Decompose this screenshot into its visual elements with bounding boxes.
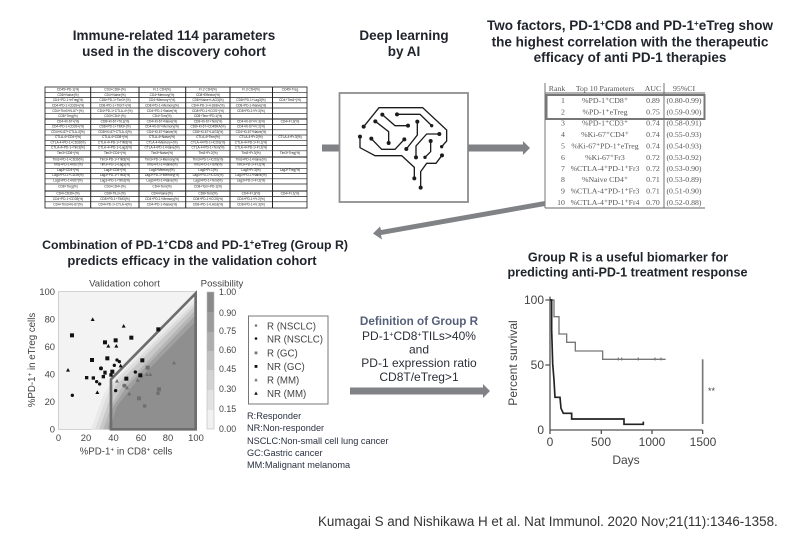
table: 114 immune parameters: CD3+CD4+(%) <box>104 114 126 118</box>
table: 114 immune parameters: CD4+Memory(%) <box>150 93 174 97</box>
chart title: Validation cohort <box>89 278 160 290</box>
table: 114 immune parameters: CTLA-4+Tem(%) <box>196 135 220 139</box>
table: 114 immune parameters: Fr.2 CD4(%) <box>199 88 217 92</box>
colour scale: possibility: 0.45 <box>219 364 236 374</box>
table: top 10 parameters: %CTLA-4⁺PD-1⁺Fr3 <box>571 186 640 196</box>
table: 114 immune parameters: Lag3+PD-1+Ki67(%) <box>53 178 83 182</box>
table: 114 immune parameters <box>45 87 307 208</box>
survival chart <box>506 293 717 467</box>
table: top 10 parameters: 0.75 <box>646 108 660 116</box>
x axis labels: 20 <box>81 432 91 443</box>
y axis labels <box>39 286 55 434</box>
heading: two factors: CD8 and PD-1 <box>605 18 694 33</box>
table: 114 immune parameters: CD8+TILs+(%) <box>104 192 126 196</box>
table: top 10 parameters: 0.71 <box>646 175 660 184</box>
survival chart: 0 <box>537 423 544 437</box>
table: top 10 parameters: (0.55-0.93) <box>666 130 702 139</box>
table: top 10 parameters: 7 <box>561 164 565 173</box>
survival chart: 0 <box>547 435 554 449</box>
heading: deep learning <box>359 28 449 59</box>
definition of group R: TILs>40% <box>422 329 476 343</box>
table: 114 immune parameters: CD4+PD-1+Fr.2(%) <box>237 197 265 201</box>
definition of group R: PD-1 expression ratio <box>361 356 477 370</box>
table: 114 immune parameters: CD4+CD39+(%) <box>56 192 80 196</box>
table: 114 immune parameters: CD8+PD-1+Naive(%) <box>236 104 266 108</box>
table: 114 immune parameters: Lag3+Fr.1(%) <box>198 168 218 172</box>
heading: deep learning: Deep learning <box>359 28 449 43</box>
heading: combination: Combination of PD-1 <box>42 238 164 252</box>
table: 114 immune parameters: Tim3+PD-1+Naive(%) <box>146 163 178 167</box>
table: 114 immune parameters: Lag3+PD-1+Fr.2(%) <box>237 178 265 182</box>
legend: R (MM) <box>267 376 299 386</box>
table: 114 immune parameters: CD8+Ki-67+LAG3(%) <box>193 130 223 134</box>
table: 114 immune parameters: CTLA-4+PD-1+TIM3(%) <box>98 140 132 144</box>
y axis title: %PD-1 <box>27 377 38 407</box>
table: top 10 parameters: 0.72 <box>646 164 660 173</box>
legend: R (GC) <box>267 348 298 360</box>
definition of group R: PD-1 <box>362 329 389 343</box>
table: 114 immune parameters: CD4+Tim3+(%) <box>279 98 301 102</box>
table: 114 immune parameters: Tim3+PD-1+Lag3(%) <box>100 163 130 167</box>
legend: R (NSCLC) <box>267 322 316 332</box>
table: 114 immune parameters: CD8+PD-1+Memory(%) <box>145 104 179 108</box>
table: 114 immune parameters: CD8+PD-1+ICOS+(%) <box>192 109 224 113</box>
table: 114 immune parameters: CTLA-4+CD8+(%) <box>102 135 128 139</box>
x axis title: + <box>110 446 114 454</box>
y axis labels: 80 <box>45 314 55 324</box>
survival axes <box>545 297 703 434</box>
table: 114 immune parameters: CTLA-4+PD-1+Fr.1(%) <box>235 140 267 144</box>
table: 114 immune parameters: CD8+Tem+PD-1(%) <box>194 114 222 118</box>
abbreviations: NR:Non-responder <box>247 423 324 433</box>
y axis labels: 20 <box>45 396 55 407</box>
y axis labels: 60 <box>45 341 55 352</box>
heading: immune parameters <box>73 28 275 59</box>
definition of group R: and <box>409 342 429 356</box>
table: 114 immune parameters: CD4+Tim3+Ki-67(%) <box>53 202 83 206</box>
table: 114 immune parameters: Tim3+PD-1+Memory(%) <box>145 158 179 162</box>
table: 114 immune parameters: CD4+Fr.3(%) <box>242 192 260 196</box>
table: top 10 parameters: (0.59-0.90) <box>666 108 702 116</box>
heading: two factors <box>487 18 773 65</box>
table: 114 immune parameters: CTLA-4+Fr.3(%) <box>278 135 302 139</box>
table: 114 immune parameters: CD8+Effector(%) <box>196 93 220 97</box>
table: 114 immune parameters: Tim3+PD-1+Tem(%) <box>194 163 222 167</box>
survival chart: 1500 <box>690 435 717 449</box>
table: 114 immune parameters: CD4+PD-1+CD39(%) <box>53 197 83 201</box>
table: top 10 parameters: %Ki-67⁺CD4⁺ <box>581 130 629 139</box>
table: top 10 parameters: 9 <box>561 186 565 196</box>
significance bar <box>700 359 705 424</box>
table: 114 immune parameters: CD4+Naive(%) <box>151 192 173 196</box>
table: 114 immune parameters: CD8+Naive(%) <box>57 93 79 97</box>
table: top 10 parameters: 10 <box>557 198 565 207</box>
table: 114 immune parameters: CD4+PD-1+CTLA-4(%) <box>98 202 132 206</box>
table: 114 immune parameters: CTLA-4+Naive(%) <box>149 135 175 139</box>
y axis title: in eTreg cells <box>27 313 38 373</box>
table: 114 immune parameters: Tim3+Fr.2(%) <box>198 151 218 155</box>
table: 114 immune parameters: Lag3+Treg(%) <box>280 168 300 172</box>
table: 114 immune parameters: CD3+CD4+(%) <box>104 184 126 188</box>
table: top 10 parameters: 8 <box>561 175 565 184</box>
table: 114 immune parameters: Lag3+PD-1+CD39(%) <box>52 173 84 177</box>
survival chart: 50 <box>531 358 544 372</box>
table: top 10 parameters: 0.72 <box>646 153 660 162</box>
definition of group R: CD8T/eTreg>1 <box>379 370 459 384</box>
table: 114 immune parameters: CD4+Tem(%) <box>152 184 172 188</box>
colour scale: possibility: 0.15 <box>219 404 236 414</box>
legend <box>248 316 328 404</box>
table: top 10 parameters: %Ki-67⁺PD-1⁺eTreg <box>571 142 639 150</box>
table: 114 immune parameters: Tim3+PD-1+TIM3(%) <box>100 158 130 162</box>
table: 114 immune parameters: CD8+Ki-67+CTLA-4(%) <box>98 130 132 134</box>
table: 114 immune parameters: CD8+Ki-67+TILs(%) <box>101 119 129 123</box>
panel: brain icon box <box>340 93 468 202</box>
table: top 10 parameters: (0.53-0.92) <box>666 153 702 162</box>
x axis labels: 0 <box>56 432 61 443</box>
table: top 10 parameters: 1 <box>561 96 565 105</box>
table: top 10 parameters: 6 <box>561 153 565 162</box>
heading: two factors: the highest correlation with the therapeutic <box>492 34 769 50</box>
table: top 10 parameters: 0.71 <box>646 186 660 196</box>
table: top 10 parameters: %CTLA-4⁺PD-1⁺Fr3 <box>571 164 640 173</box>
table: top 10 parameters: 3 <box>561 118 565 128</box>
colour scale: possibility: 1.00 <box>219 287 236 297</box>
colour scale: possibility: Possibility <box>201 278 244 290</box>
table: top 10 parameters: (0.58-0.91) <box>666 118 702 128</box>
y axis title: + <box>27 373 34 377</box>
table: top 10 parameters: (0.53-0.89) <box>666 175 702 184</box>
heading: two factors: + <box>600 19 605 28</box>
colour scale: possibility <box>201 278 244 434</box>
table: 114 immune parameters: CD4+PD-1+eTreg(%) <box>53 98 83 102</box>
table: 114 immune parameters: CD8+PD-1+Lag3(%) <box>236 98 266 102</box>
table: 114 immune parameters: CD8+PD-1+Tim3+(%) <box>99 98 131 102</box>
table: 114 immune parameters: Tim3+PD-1+Naive(%) <box>235 158 267 162</box>
table: 114 immune parameters: CTLA-4+PD-1+ICOS(%) <box>191 140 225 144</box>
x axis labels: 60 <box>136 432 146 443</box>
table: 114 immune parameters: Lag3+Memory(%) <box>149 168 175 172</box>
scatter plot: validation cohort <box>27 278 204 458</box>
table: 114 immune parameters: CD45+PD-1(%) <box>57 88 79 92</box>
survival chart: 1000 <box>639 435 666 449</box>
table: 114 immune parameters: CTLA-4+PD-1+Lag3(%) <box>98 146 132 150</box>
colour scale: possibility: 0.60 <box>219 345 236 355</box>
table: 114 immune parameters: Tim3+CD4+(%) <box>104 151 126 155</box>
y axis labels: 40 <box>45 368 55 380</box>
table: 114 immune parameters: Tim3+Treg(%) <box>280 151 300 155</box>
table: 114 immune parameters: CD8+PD-1+Fr.3(%) <box>237 109 265 113</box>
heading: combination: + <box>164 238 169 247</box>
table: top 10 parameters: %PD-1⁺CD3⁺ <box>582 118 628 128</box>
survival chart: ** <box>708 386 716 396</box>
survival chart: Days <box>612 453 640 467</box>
x axis labels: 80 <box>163 432 173 443</box>
table: 114 immune parameters: CD8+Treg(%) <box>58 114 78 118</box>
table: 114 immune parameters: Lag3+CD8+(%) <box>104 168 126 172</box>
table: top 10 parameters: %CTLA-4⁺PD-1⁺Fr4 <box>571 198 640 207</box>
table: top 10 parameters: 4 <box>561 130 565 139</box>
table: 114 immune parameters: Fr.1 CD4(%) <box>153 88 171 92</box>
survival chart: Percent survival <box>506 320 520 406</box>
table: 114 immune parameters: Tim3+PD-1+ICOS(%) <box>193 158 223 162</box>
heading: group R: Group R is a useful biomarker for <box>528 250 728 264</box>
table: 114 immune parameters: Fr.3 CD4(%) <box>242 88 260 92</box>
table: 114 immune parameters: CD4+Ki-67+Naive(%) <box>147 130 177 134</box>
table: 114 immune parameters: CTLA-4+PD-1+Naive(%) <box>144 146 180 150</box>
abbreviations: NSCLC:Non-small cell lung cancer <box>247 436 388 446</box>
heading: two factors: efficacy of anti PD-1 therapies <box>534 50 726 65</box>
table: 114 immune parameters: Lag3+PD-1+Naive(%) <box>235 173 267 177</box>
x axis labels: 100 <box>188 432 204 443</box>
table: 114 immune parameters: Lag3+PD-1+ICOS(%) <box>193 173 223 177</box>
table: top 10 parameters: (0.54-0.93) <box>666 142 702 150</box>
table: 114 immune parameters: CD4+Fr.3(%) <box>281 119 299 123</box>
legend: NR (NSCLC) <box>267 334 323 346</box>
table: 114 immune parameters: CD4+Ki-67+(%) <box>57 119 79 123</box>
table: 114 immune parameters: CD8+PD-1+TIGIT+(%) <box>99 104 131 108</box>
x axis title: in CD8 <box>114 446 146 458</box>
survival chart: 100 <box>524 293 544 307</box>
table: 114 immune parameters: CD8+Ki-67+CD45RA(%) <box>190 125 226 129</box>
heading: two factors: Two factors, PD-1 <box>487 18 600 33</box>
heading: combination: eTreg (Group R) <box>254 238 348 252</box>
survival chart: 500 <box>591 435 611 449</box>
table: 114 immune parameters: CD8+Tem(%) <box>198 192 218 196</box>
table: 114 immune parameters: Tim3+PD-1+CD39(%) <box>52 158 84 162</box>
table: top 10 parameters: 2 <box>561 108 565 116</box>
table: 114 immune parameters: CD4+Ki-67+Fr.2(%) <box>237 125 265 129</box>
responder curve <box>550 300 666 360</box>
definition of group R: Definition of Group R <box>360 315 479 328</box>
table: 114 immune parameters: CD45+Treg <box>282 88 298 92</box>
citation: Kumagai S and Nishikawa H et al. Nat Immunol. 2020 Nov;21(11):1346-1358. <box>318 514 778 529</box>
table: 114 immune parameters: CD4+Tim3+Ki-67+(%) <box>52 109 84 113</box>
arrow: results to validation <box>373 201 545 240</box>
table: top 10 parameters: %Naive CD4⁺ <box>582 175 628 184</box>
heading: group R <box>507 250 748 280</box>
heading: combination: predicts efficacy in the validation cohort <box>67 253 317 268</box>
abbreviations: R:Responder <box>247 411 301 421</box>
table: 114 immune parameters: CTLA-4+PD-1+Tim3(%) <box>51 146 85 150</box>
arrow: AI to results <box>468 141 530 155</box>
table: 114 immune parameters: CD8+PD-1+ICOS(%) <box>193 197 223 201</box>
colour scale: possibility: 0.75 <box>219 326 236 336</box>
icon: circuit brain <box>358 108 447 190</box>
abbreviations <box>247 411 388 470</box>
table: 114 immune parameters: CD4+PD-1+CTLA-4+(%) <box>97 109 133 113</box>
table: 114 immune parameters: CD8+PD-1+LAG3(%) <box>193 202 223 206</box>
arrow: table to AI <box>322 144 339 152</box>
heading: group R: predicting anti-PD-1 treatment response <box>507 266 748 280</box>
definition of group R: + <box>417 332 422 338</box>
table: 114 immune parameters: CD4+Ki-67+Memory(%) <box>145 125 179 129</box>
table: 114 immune parameters: CD8+PD-1+TIM3+(%) <box>99 125 131 129</box>
table: 114 immune parameters: CD4+PD-1+Naive(%) <box>147 109 177 113</box>
table: 114 immune parameters: Tim3+PD-1+Fr.2(%) <box>237 163 265 167</box>
table: 114 immune parameters: Tim3+Naive(%) <box>151 151 173 155</box>
x axis labels: 40 <box>108 432 119 443</box>
table: 114 immune parameters: Lag3+CD4+(%) <box>57 168 79 172</box>
table: top 10 parameters: %PD-1⁺CD8⁺ <box>582 96 628 105</box>
table: 114 immune parameters: CD4+PD-1+Memory(%) <box>145 197 179 201</box>
definition of group R <box>360 315 479 384</box>
table: 114 immune parameters: CTLA-4+Fr.2(%) <box>239 135 263 139</box>
table: 114 immune parameters: Tim3+Fr.3(%) <box>241 151 261 155</box>
table: 114 immune parameters: CD8+Treg(%) <box>58 184 78 188</box>
table: 114 immune parameters: CD4+Ki-67+CTLA-4(%) <box>51 130 85 134</box>
x axis labels <box>56 432 204 443</box>
definition of group R: + <box>389 332 393 338</box>
definition of group R: CD8 <box>393 329 418 343</box>
colour scale: possibility: 0.00 <box>219 424 236 434</box>
legend: NR (MM) <box>267 389 306 400</box>
table: 114 immune parameters: Lag3+PD-1+TIM3(%) <box>100 173 130 177</box>
table: top 10 parameters: AUC <box>645 84 661 93</box>
legend: NR (GC) <box>267 362 305 373</box>
table: 114 immune parameters: CTLA-4+Memory+(%) <box>146 140 178 144</box>
table: top 10 parameters: 0.74 <box>646 130 660 139</box>
table: 114 immune parameters: CD8+PD-1+Fr.3(%) <box>237 202 265 206</box>
heading: combination <box>42 238 348 268</box>
table: 114 immune parameters: CD4+PD-1+CD39+(%) <box>52 104 84 108</box>
table: top 10 parameters: (0.51-0.90) <box>666 186 702 196</box>
table: top 10 parameters: %Ki-67⁺Fr3 <box>585 153 625 162</box>
table: top 10 parameters: Top 10 Parameters <box>576 84 634 93</box>
table: top 10 parameters: 0.74 <box>646 142 660 150</box>
heading: deep learning: by AI <box>388 44 420 59</box>
y axis labels: 100 <box>39 286 55 297</box>
table: top 10 parameters: %PD-1⁺eTreg <box>583 108 628 116</box>
x axis title: + <box>146 446 150 454</box>
table: 114 immune parameters: CD4+Ki-67+Naive(%) <box>147 119 177 123</box>
table: top 10 parameters: (0.53-0.90) <box>666 164 702 173</box>
colour scale: possibility: 0.30 <box>219 384 236 394</box>
table: top 10 parameters: 0.70 <box>646 198 660 207</box>
table: 114 immune parameters: Lag3+PD-1+Tem(%) <box>193 178 223 182</box>
table: 114 immune parameters: Lag3+Fr.3(%) <box>241 168 261 172</box>
table: top 10 parameters: (0.80-0.99) <box>666 96 702 105</box>
heading: two factors: eTreg show <box>699 18 773 33</box>
abbreviations: MM:Malignant melanoma <box>247 460 351 470</box>
table: 114 immune parameters: CD4+PD-1+CD39+(%) <box>52 125 84 129</box>
y axis labels: 0 <box>50 424 55 434</box>
table: 114 immune parameters: CD4+Tcm(%) <box>152 114 172 118</box>
table: 114 immune parameters: CD4+Ki-67+Fr.3(%) <box>237 119 265 123</box>
x axis title: %PD-1 <box>80 446 110 458</box>
table: 114 immune parameters: CD4+Fr.1(%) <box>281 192 299 196</box>
table: 114 immune parameters: CD8+PD-1+TIM3(%) <box>100 197 130 201</box>
heading: combination: + <box>250 238 255 247</box>
table: 114 immune parameters: CD8+Ki-67+Tem(%) <box>194 119 222 123</box>
non-responder curve <box>550 300 643 424</box>
table: 114 immune parameters: CD4+Ki-67+Naive(%) <box>236 130 266 134</box>
table: 114 immune parameters: CTLA-4+CD4+(%) <box>55 135 81 139</box>
x axis title: cells <box>150 446 172 458</box>
heading: combination: CD8 and PD-1 <box>168 238 250 252</box>
table: 114 immune parameters: CTLA-4+PD-1+CD39(%) <box>50 140 86 144</box>
table: 114 immune parameters: Tim3+CD8+(%) <box>57 151 79 155</box>
table: 114 immune parameters: CD4+Memory+(%) <box>149 98 175 102</box>
table: top 10 parameters: 0.89 <box>646 96 660 105</box>
table: 114 immune parameters: CTLA-4+PD-1+Fr.2(%) <box>235 146 267 150</box>
table: top 10 parameters: (0.52-0.88) <box>666 198 702 207</box>
table: 114 immune parameters: CD8+Naive+LAG3(%) <box>192 98 224 102</box>
abbreviations: GC:Gastric cancer <box>247 448 323 458</box>
table: top 10 parameters: 95%CI <box>673 84 695 93</box>
table: top 10 parameters: Rank <box>549 84 565 93</box>
table: top 10 parameters: 0.74 <box>646 118 660 128</box>
table: 114 immune parameters: CD4+Naive(%) <box>104 93 126 97</box>
table: top 10 parameters <box>545 83 705 208</box>
table: 114 immune parameters: Lag3+PD-1+Naive(%) <box>146 178 178 182</box>
heading: two factors: + <box>694 19 699 28</box>
table: 114 immune parameters: Tim3+PD-1+Ki67(%) <box>53 163 83 167</box>
table: 114 immune parameters: CD8+Tcm+PD-1(%) <box>194 184 222 188</box>
table: 114 immune parameters: Lag3+PD-1+Memory(%) <box>145 173 179 177</box>
table: top 10 parameters: 5 <box>561 142 565 150</box>
table: 114 immune parameters: Lag3+PD-1+Tim3(%) <box>100 178 130 182</box>
heading: immune parameters: Immune-related 114 parameters <box>73 28 275 43</box>
table: 114 immune parameters: CD4+PD-1+Naive(%) <box>147 202 177 206</box>
table: 114 immune parameters: CD3+CD8+(%) <box>104 88 126 92</box>
arrow: definition to survival <box>350 384 490 398</box>
heading: immune parameters: used in the discovery cohort <box>82 44 266 59</box>
table: 114 immune parameters: CD4+PD-1+4-1BB+(%) <box>191 104 225 108</box>
table: 114 immune parameters: CTLA-4+PD-1+Tem(%) <box>192 146 224 150</box>
colour scale: possibility: 0.90 <box>219 308 236 318</box>
